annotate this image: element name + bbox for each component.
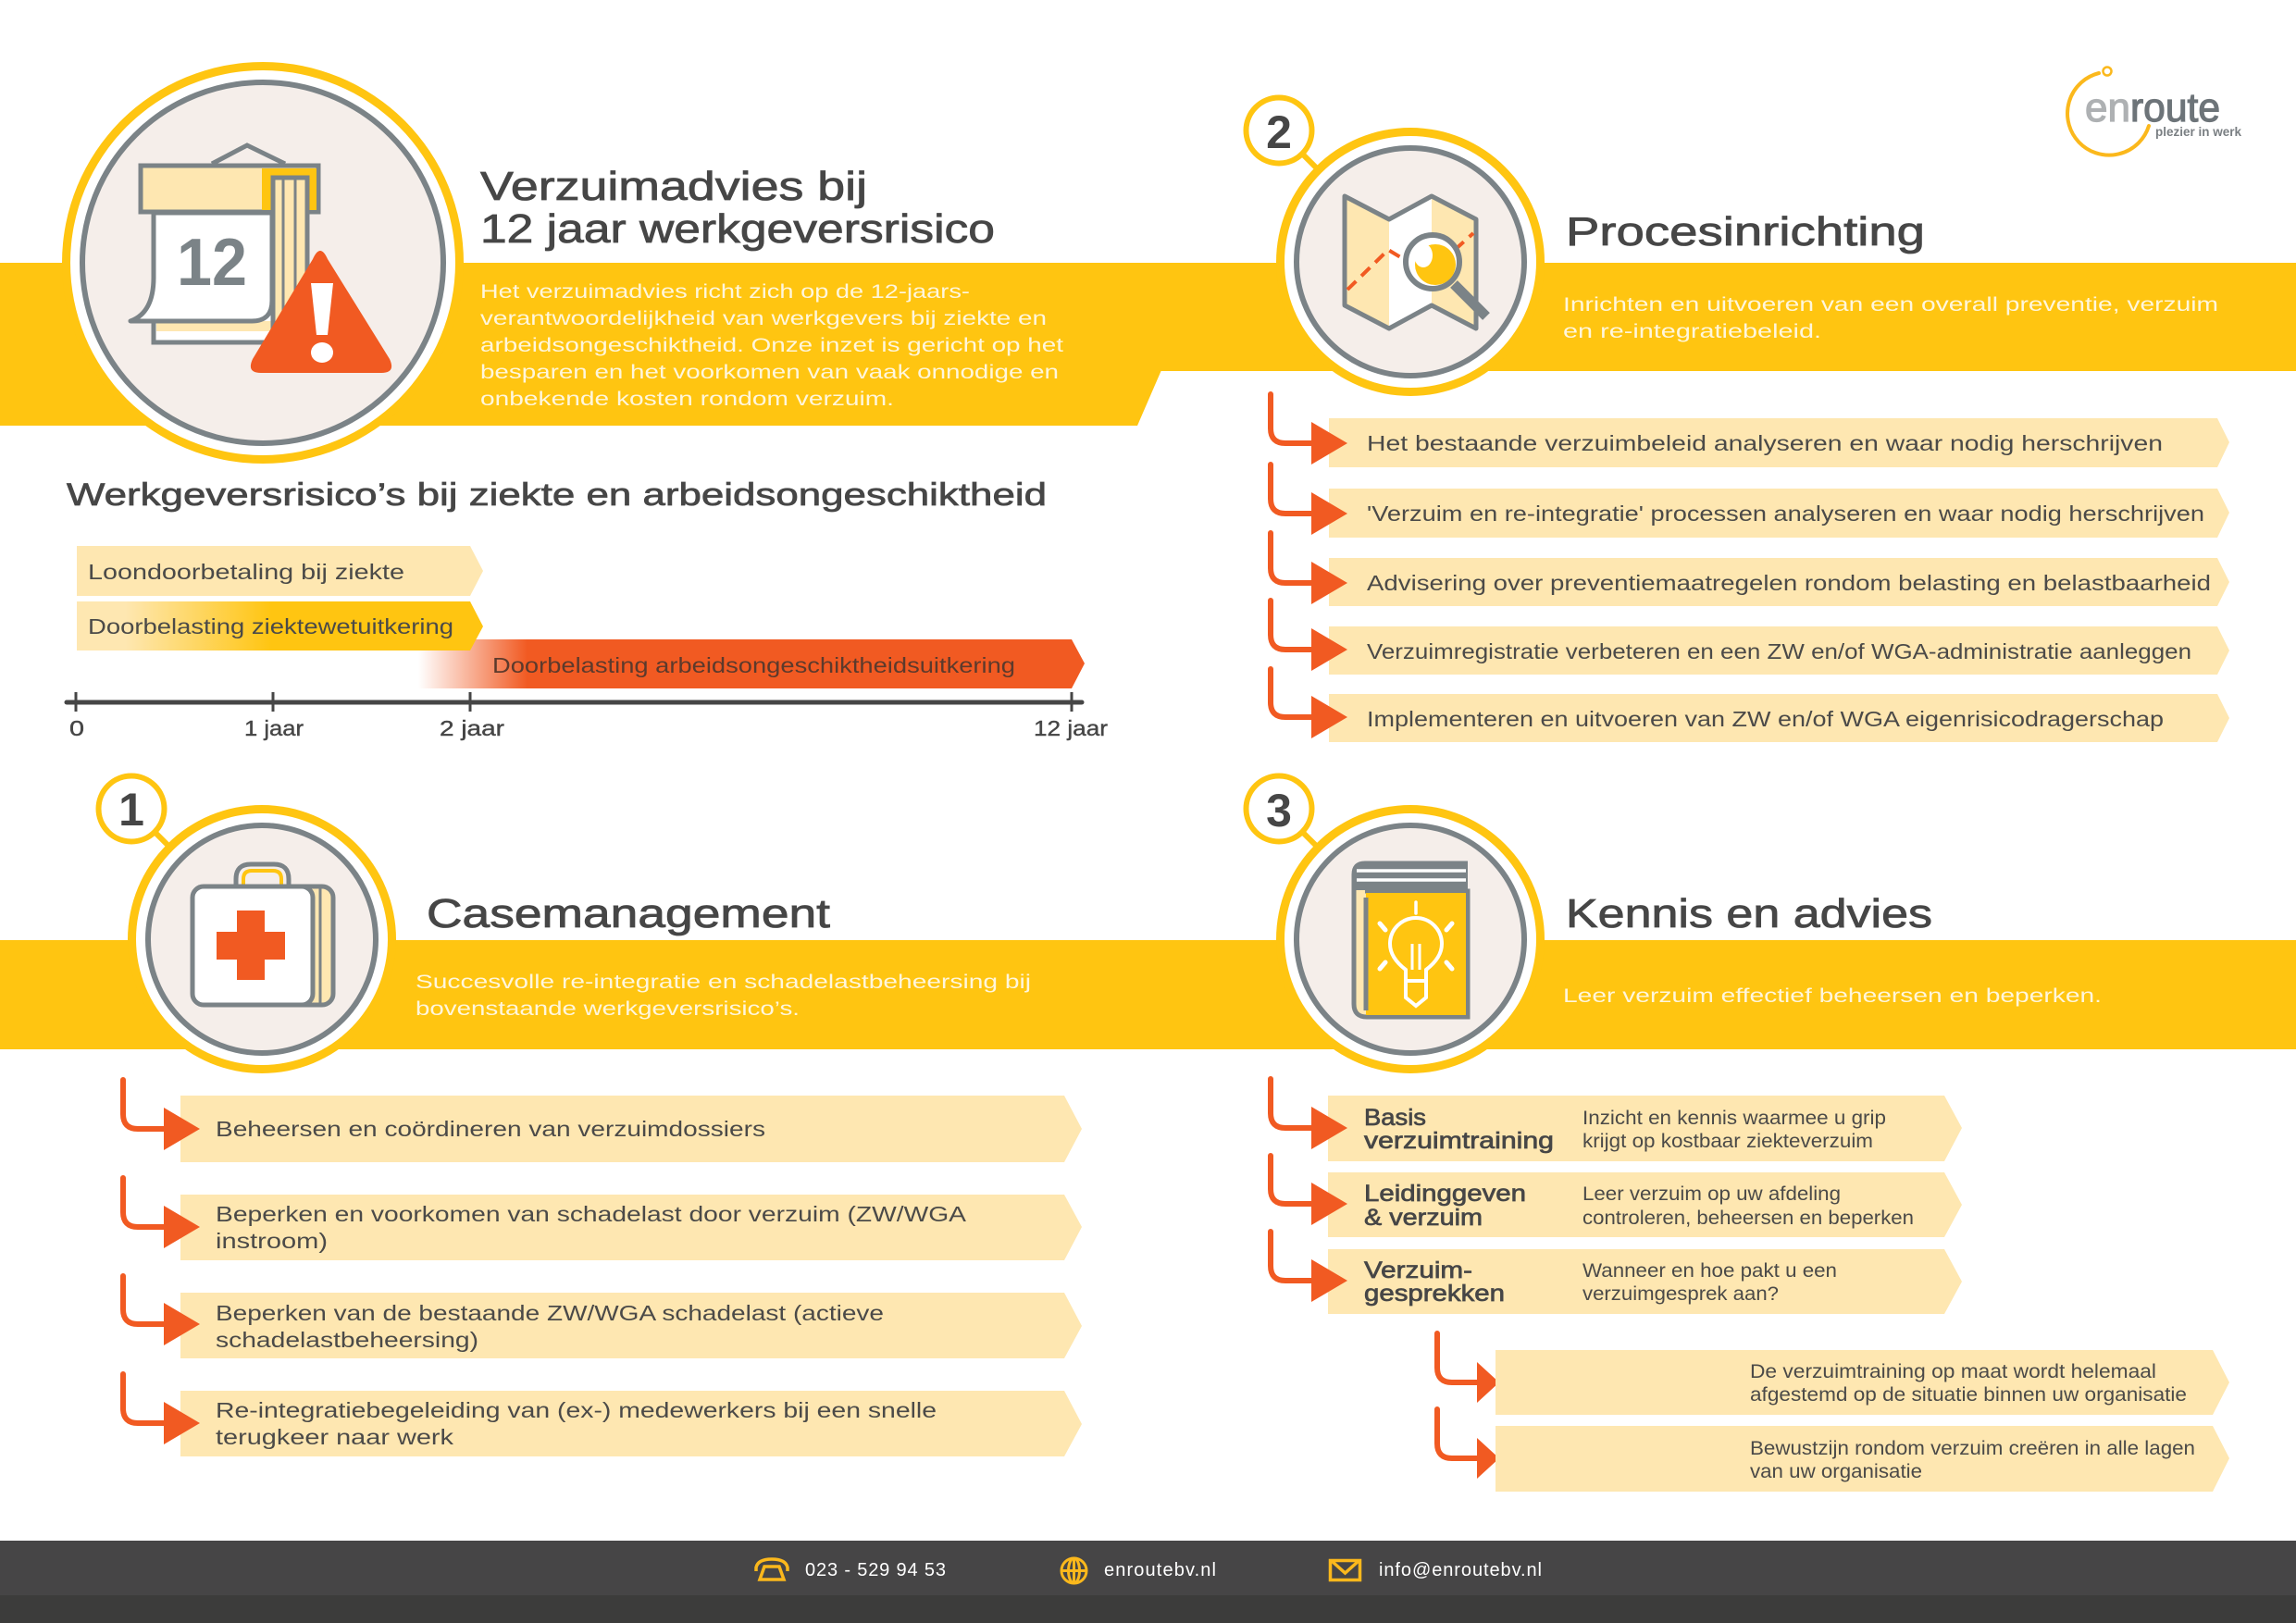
item: basis verzuimtraining: Basis: [1364, 1105, 1426, 1131]
item: basis verzuimtraining: krijgt op kostbaar ziekteverzuim: [1582, 1131, 1873, 1152]
item: basis verzuimtraining: verzuimtraining: [1364, 1128, 1554, 1154]
heading: procesinrichting: Procesinrichting: [1566, 209, 1925, 254]
item: preventiemaatregelen: Advisering over preventiemaatregelen rondom belasting en belastbaarheid: [1367, 571, 2211, 595]
item: bestaande schadelast: schadelastbeheersing): [216, 1328, 478, 1352]
bar: doorbelasting arbeidsongeschiktheidsuitkering: Doorbelasting arbeidsongeschiktheidsuitkering: [492, 653, 1015, 677]
icon: calendar with warning: [130, 145, 391, 373]
text block: casemanagement intro: bovenstaande werkgeversrisico’s.: [416, 997, 800, 1020]
timeline axis: 0: [69, 716, 84, 740]
text block: casemanagement intro: [416, 971, 1031, 1020]
item: bestaande schadelast: [123, 1276, 1082, 1358]
item: verzuimdossiers: Beheersen en coördineren van verzuimdossiers: [216, 1117, 765, 1141]
text block: verzuimadvies intro: onbekende kosten rondom verzuim.: [480, 388, 894, 410]
logo: enroute: en: [2085, 85, 2130, 130]
item: verzuimgesprekken: [1271, 1232, 1962, 1314]
icon: phone: [756, 1559, 788, 1580]
heading: verzuimadvies: Verzuimadvies bij: [480, 164, 867, 209]
item: beleid analyseren: [1271, 394, 2229, 467]
item: processen analyseren: [1271, 465, 2229, 538]
item: preventiemaatregelen: [1271, 533, 2229, 606]
item: verzuimgesprekken: Wanneer en hoe pakt u een: [1582, 1260, 1837, 1282]
icon: medical kit: [192, 864, 333, 1005]
item: re-integratiebegeleiding: [123, 1374, 1082, 1456]
heading: verzuimadvies: [480, 164, 995, 252]
item: basis verzuimtraining: Inzicht en kennis waarmee u grip: [1582, 1108, 1886, 1129]
item: bewustzijn: [1437, 1409, 2229, 1492]
text: phone number: 023 - 529 94 53: [805, 1560, 946, 1580]
text block: kennis intro: Leer verzuim effectief beheersen en beperken.: [1563, 985, 2102, 1007]
text: e-mail: info@enroutebv.nl: [1379, 1560, 1542, 1580]
text block: verzuimadvies intro: besparen en het voorkomen van vaak onnodige en: [480, 361, 1059, 383]
item: eigenrisicodragerschap: Implementeren en uitvoeren van ZW en/of WGA eigenrisicodragerschap: [1367, 707, 2164, 731]
item: verzuimgesprekken: gesprekken: [1364, 1281, 1505, 1307]
timeline axis: 12 jaar: [1034, 716, 1108, 740]
icon ring: medical kit circle: [98, 775, 396, 1073]
item: verzuimregistratie: Verzuimregistratie verbeteren en een ZW en/of WGA-administratie aanleggen: [1367, 639, 2191, 663]
item: verzuimdossiers: [123, 1080, 1082, 1162]
bar: loondoorbetaling: [77, 546, 483, 596]
icon: book with light bulb: [1352, 861, 1469, 1017]
text: website: enroutebv.nl: [1104, 1560, 1216, 1580]
item: schadelast voorkomen: Beperken en voorkomen van schadelast door verzuim (ZW/WGA: [216, 1202, 967, 1226]
timeline axis: 2 jaar: [440, 716, 504, 740]
number badge 3: 3: [1266, 785, 1292, 836]
item: schadelast voorkomen: [123, 1178, 1082, 1260]
panel: casemanagement: [0, 775, 2296, 1456]
item: processen analyseren: 'Verzuim en re-integratie' processen analyseren en waar nodig herschrijven: [1367, 502, 2204, 526]
text block: verzuimadvies intro: verantwoordelijkheid van werkgevers bij ziekte en: [480, 307, 1047, 329]
panel: werkgeversrisico timeline: [67, 477, 1108, 740]
item: verzuimtraining op maat: [1437, 1333, 2229, 1415]
item: verzuimgesprekken: verzuimgesprek aan?: [1582, 1283, 1779, 1305]
item: bestaande schadelast: Beperken van de bestaande ZW/WGA schadelast (actieve: [216, 1301, 884, 1325]
icon: envelope: [1331, 1560, 1360, 1580]
item: verzuimtraining op maat: afgestemd op de situatie binnen uw organisatie: [1750, 1384, 2187, 1406]
panel: kennis en advies: [1246, 775, 2229, 1492]
icon ring: calendar circle: [62, 62, 464, 464]
item: leidinggeven en verzuim: controleren, beheersen en beperken: [1582, 1208, 1914, 1229]
item: eigenrisicodragerschap: [1271, 669, 2229, 742]
item: basis verzuimtraining: [1271, 1079, 1962, 1161]
item: leidinggeven en verzuim: Leer verzuim op uw afdeling: [1582, 1183, 1841, 1205]
item: re-integratiebegeleiding: terugkeer naar werk: [216, 1425, 454, 1449]
icon: calendar with warning: 12: [177, 226, 247, 300]
banner: procesinrichting: [1148, 263, 2296, 371]
footer: [0, 1541, 2296, 1623]
item: leidinggeven en verzuim: [1271, 1156, 1962, 1237]
item: verzuimgesprekken: Verzuim-: [1364, 1258, 1472, 1283]
icon: map with magnifier: [1345, 196, 1486, 328]
logo: enroute: plezier in werk: [2155, 124, 2241, 139]
item: bewustzijn: van uw organisatie: [1750, 1461, 1922, 1482]
timeline axis: [67, 692, 1108, 740]
heading: casemanagement: Casemanagement: [427, 891, 830, 936]
item: verzuimregistratie: [1271, 601, 2229, 675]
item: bewustzijn: Bewustzijn rondom verzuim creëren in alle lagen: [1750, 1438, 2195, 1459]
icon: globe: [1061, 1558, 1086, 1583]
text block: casemanagement intro: Succesvolle re-integratie en schadelastbeheersing bij: [416, 971, 1031, 993]
banner: casemanagement and kennis: [0, 940, 2296, 1049]
heading: kennis en advies: Kennis en advies: [1566, 891, 1932, 936]
panel: verzuimadvies header: [0, 62, 2296, 464]
banner: verzuimadvies: [0, 263, 1161, 426]
bar: loondoorbetaling: Loondoorbetaling bij ziekte: [88, 560, 404, 584]
item: verzuimtraining op maat: De verzuimtraining op maat wordt helemaal: [1750, 1361, 2156, 1382]
heading: verzuimadvies: 12 jaar werkgeversrisico: [480, 206, 995, 252]
item: re-integratiebegeleiding: Re-integratiebegeleiding van (ex-) medewerkers bij een snelle: [216, 1398, 937, 1422]
icon ring: book circle: [1246, 775, 1545, 1073]
logo: enroute: [2067, 67, 2241, 155]
logo: enroute: route: [2130, 85, 2220, 130]
item: leidinggeven en verzuim: & verzuim: [1364, 1205, 1483, 1231]
icon ring: map circle: [1246, 98, 1545, 396]
number badge 1: 1: [118, 784, 144, 836]
bar: doorbelasting ziektewetuitkering: [77, 601, 483, 650]
timeline axis: 1 jaar: [244, 716, 304, 740]
text block: verzuimadvies intro: Het verzuimadvies richt zich op de 12-jaars-: [480, 280, 970, 303]
heading: werkgeversrisico's: Werkgeversrisico’s bij ziekte en arbeidsongeschiktheid: [67, 477, 1047, 513]
number badge 2: 2: [1266, 106, 1292, 158]
text block: verzuimadvies intro: [480, 280, 1063, 410]
text block: verzuimadvies intro: arbeidsongeschiktheid. Onze inzet is gericht op het: [480, 334, 1063, 356]
item: beleid analyseren: Het bestaande verzuimbeleid analyseren en waar nodig herschrijven: [1367, 431, 2163, 455]
text block: procesinrichting intro: en re-integratiebeleid.: [1563, 320, 1821, 342]
bar: doorbelasting ziektewetuitkering: Doorbelasting ziektewetuitkering: [88, 614, 453, 638]
text block: procesinrichting intro: Inrichten en uitvoeren van een overall preventie, verzuim: [1563, 293, 2218, 316]
item: leidinggeven en verzuim: Leidinggeven: [1364, 1181, 1526, 1207]
bar: doorbelasting arbeidsongeschiktheidsuitkering: [418, 639, 1085, 688]
text block: procesinrichting intro: [1563, 293, 2218, 342]
item: schadelast voorkomen: instroom): [216, 1229, 328, 1253]
panel: procesinrichting: [1246, 98, 2229, 742]
